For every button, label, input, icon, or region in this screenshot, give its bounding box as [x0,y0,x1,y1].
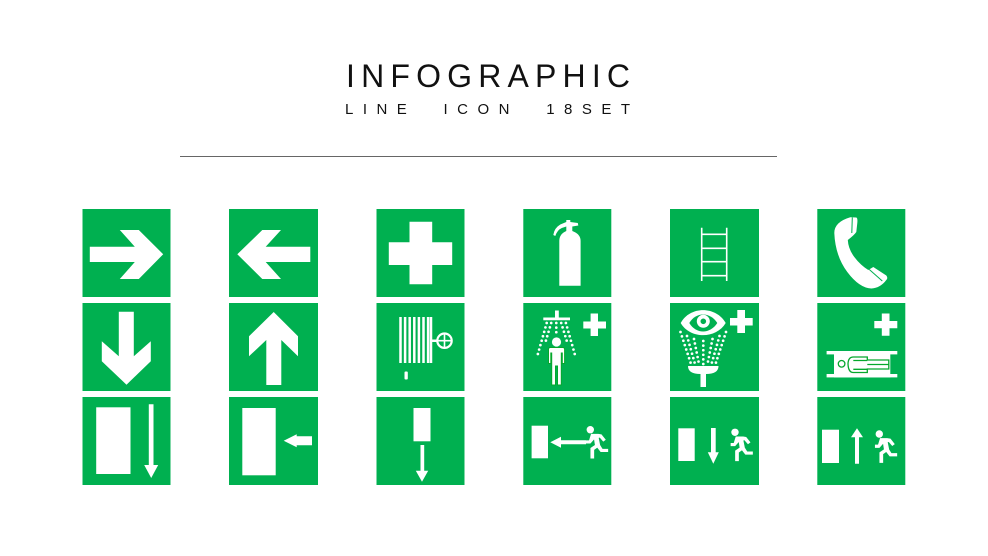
panel: first aid cross [376,209,464,297]
icon: first aid cross [389,222,452,284]
icon: hose reel [400,317,452,380]
panel: ladder [670,209,759,297]
panel: exit left with runner [523,397,611,485]
icon: down arrow [708,428,719,464]
icon: door [678,428,695,461]
subtitle: LINE ICON 18SET [345,101,630,118]
icon: telephone handset [834,217,887,288]
panel: door with down arrow [82,397,170,485]
icon: down arrow [416,445,428,482]
panel: small door with down arrow [376,397,464,485]
icon: small first aid cross [730,310,753,333]
icon: long down arrow [144,404,158,478]
icon: up arrow [249,312,298,385]
panel: right arrow [82,209,170,297]
icon: water spray and fountain [680,332,726,387]
icon: up arrow [851,428,863,464]
icon: small first aid cross [583,314,606,336]
panel: door with left arrow [229,397,318,485]
icon: running person [586,426,608,458]
icon: right arrow [90,230,163,279]
icon: eye [681,310,726,335]
icon: door [532,426,548,458]
panel: stretcher [817,303,905,391]
panel: telephone [817,209,905,297]
icon: door [822,430,839,463]
panel: exit up with runner [817,397,905,485]
icon: stretcher with person [827,351,897,377]
icon: fire extinguisher [553,220,581,286]
icon: door [96,407,130,474]
panel: left arrow [229,209,318,297]
icon: door [414,408,430,441]
title: INFOGRAPHIC [346,58,630,94]
panel: down arrow [82,303,170,391]
icon: left arrow [550,437,586,448]
panel: fire extinguisher [523,209,611,297]
icon: left arrow [237,230,310,279]
panel: eye wash [670,303,759,391]
icon: down arrow [102,312,151,385]
panel: up arrow [229,303,318,391]
icon: running person [875,430,897,462]
icon: ladder [702,228,727,281]
icon: running person [731,429,752,461]
panel: safety shower [523,303,611,391]
icon: small first aid cross [874,314,897,336]
panel: exit down with runner [670,397,759,485]
panel: fire hose reel [376,303,464,391]
icon: short left arrow [284,434,312,447]
icon: shower with person [537,310,575,385]
icon: door [242,408,276,475]
